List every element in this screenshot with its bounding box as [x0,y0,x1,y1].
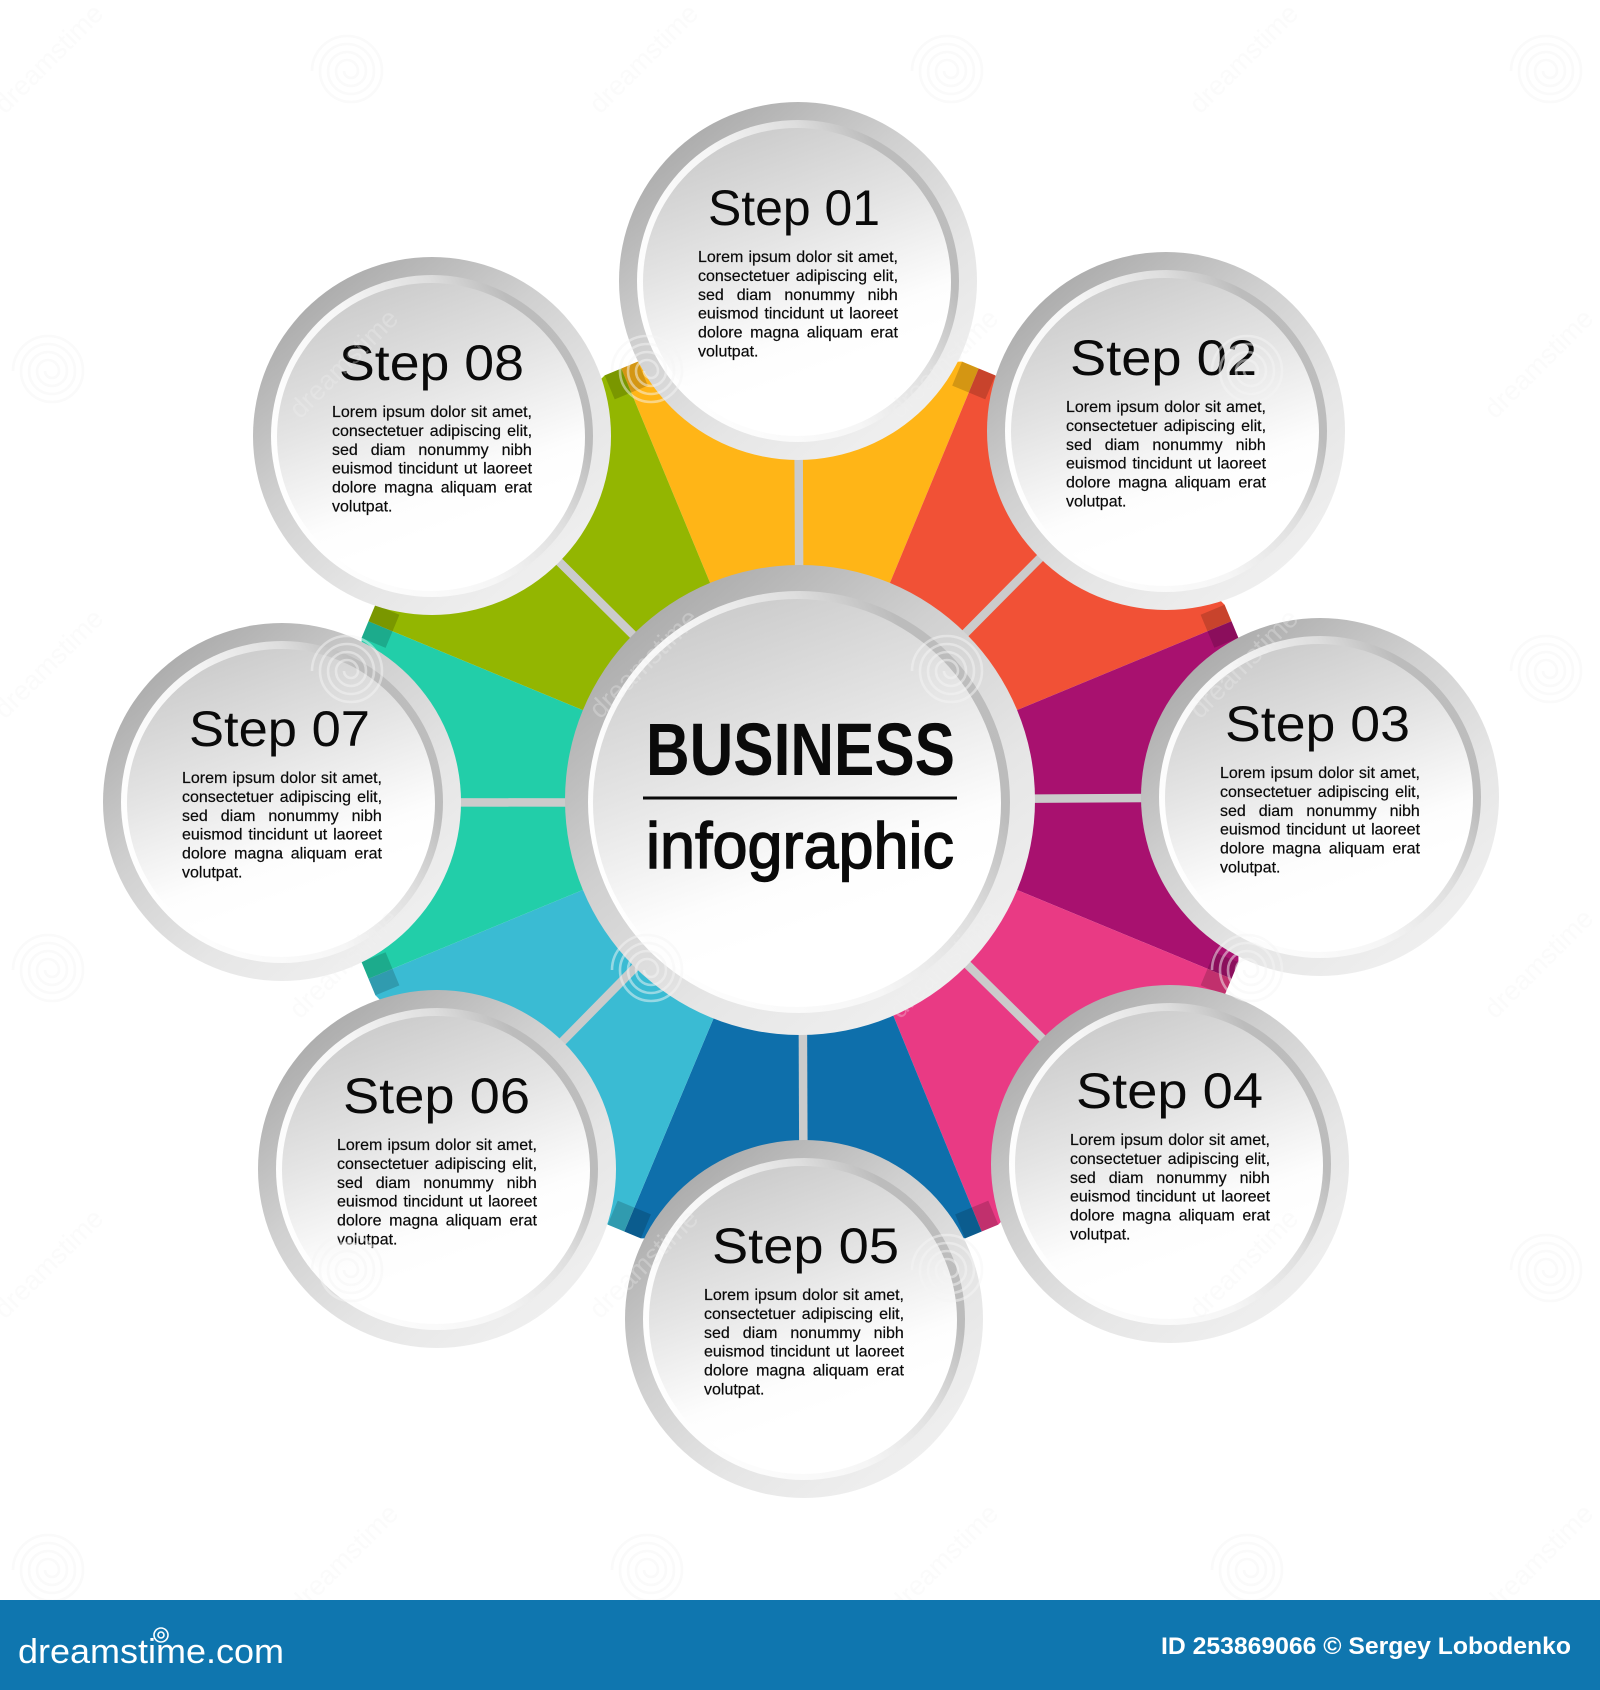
text: step 02 body: sed diam nonummy nibh [1066,437,1266,454]
watermark pattern: dreamstime [583,0,704,119]
segment: orange-red (step 02) [800,368,1232,800]
text: step 08 body: consectetuer adipiscing elit, [332,423,532,440]
text: step 01 body: volutpat. [698,344,758,360]
panel: step 05 [625,1140,983,1498]
text: step 03 body: volutpat. [1220,860,1280,876]
darker rim tips [362,362,1238,1238]
text: step 06 body: euismod tincidunt ut laoreet [337,1194,538,1211]
segment: green (step 08) [368,368,800,800]
panel: step 02 [987,252,1345,610]
text: step 01 body: euismod tincidunt ut laoreet [698,306,899,323]
text: step 02 body: Lorem ipsum dolor sit amet, [1066,399,1266,416]
center circle [565,565,1035,1035]
segment: yellow (step 01) [621,362,979,800]
heading: step 04: Step 04 [1076,1063,1263,1119]
heading: step 02: Step 02 [1070,330,1257,386]
footer bar [0,1600,1600,1690]
text: step 04 body: volutpat. [1070,1226,1130,1244]
panel: step 06 [258,990,616,1348]
colored segment wheel [362,362,1238,1238]
text: step 03 body: dolore magna aliquam erat [1220,841,1420,858]
text: step 05 body: consectetuer adipiscing elit, [704,1306,904,1323]
text: step 03 body: consectetuer adipiscing elit, [1220,784,1420,801]
text: step 05 body: volutpat. [704,1382,764,1398]
text: step 03 body: Lorem ipsum dolor sit amet, [1220,765,1420,782]
text: step 07 body: Lorem ipsum dolor sit amet, [182,770,382,787]
text: step 04 body: consectetuer adipiscing elit, [1070,1151,1270,1168]
text: step 07 body: consectetuer adipiscing elit, [182,789,382,806]
text: step 07 body: euismod tincidunt ut laoreet [182,827,383,844]
text: step 02 body: euismod tincidunt ut laoreet [1066,456,1267,473]
text: step 08 body: sed diam nonummy nibh [332,442,532,459]
text: step 06 body: Lorem ipsum dolor sit amet, [337,1137,537,1154]
segment: cyan (step 06) [368,800,805,1232]
panel: step 08 [253,257,611,615]
divider line [643,796,957,800]
watermark pattern: dreamstime [1183,0,1304,119]
text: step 03 body: euismod tincidunt ut laoreet [1220,822,1421,839]
text: step 05 body: euismod tincidunt ut laoreet [704,1344,905,1361]
heading: step 03: Step 03 [1225,696,1410,752]
heading: step 08: Step 08 [339,335,524,391]
text: step 01 body: consectetuer adipiscing elit, [698,268,898,285]
watermark pattern: dreamstime [283,1498,404,1619]
watermark pattern: dreamstime [583,603,704,724]
watermark pattern: dreamstime [583,1203,704,1324]
panel: step 04 [991,985,1349,1343]
watermark pattern: dreamstime [283,303,404,424]
heading: step 05: Step 05 [712,1218,899,1274]
text: step 06 body: volutpat. [337,1232,397,1248]
text: step 06 body: sed diam nonummy nibh [337,1175,537,1192]
text: step 08 body: volutpat. [332,498,392,516]
text: step 01 body: dolore magna aliquam erat [698,325,898,342]
watermark pattern: dreamstime [1183,603,1304,724]
text: step 04 body: euismod tincidunt ut laoreet [1070,1189,1271,1206]
segment: blue (step 05) [624,800,982,1238]
icon: logo spiral [154,1628,168,1642]
text: step 05 body: dolore magna aliquam erat [704,1363,904,1380]
watermark pattern: dreamstime [1478,303,1599,424]
segment: pink (step 04) [800,800,1232,1232]
segment: purple (step 03) [800,621,1238,979]
text: step 08 body: euismod tincidunt ut laoreet [332,461,533,478]
text: step 06 body: consectetuer adipiscing elit, [337,1156,537,1173]
text: step 06 body: dolore magna aliquam erat [337,1213,537,1230]
subtitle: infographic: infographic [646,809,954,882]
watermark pattern: dreamstime [883,303,1004,424]
text: step 02 body: dolore magna aliquam erat [1066,475,1266,492]
text: step 07 body: sed diam nonummy nibh [182,808,382,825]
text: step 04 body: sed diam nonummy nibh [1070,1170,1270,1187]
text: step 07 body: dolore magna aliquam erat [182,846,382,863]
watermark pattern: dreamstime [1183,1203,1304,1324]
title: BUSINESS: BUSINESS [646,708,955,791]
watermark pattern: dreamstime [1478,903,1599,1024]
connector bars [282,281,1320,1319]
text: step 05 body: sed diam nonummy nibh [704,1325,904,1342]
watermark pattern: dreamstime [1478,1498,1599,1619]
panel: step 03 [1141,618,1499,976]
footer credit: ID 253869066 © Sergey Lobodenko [1161,1633,1571,1660]
text: step 04 body: Lorem ipsum dolor sit amet, [1070,1132,1270,1149]
text: step 05 body: Lorem ipsum dolor sit amet, [704,1287,904,1304]
panel: step 07 [103,623,461,981]
text: step 02 body: consectetuer adipiscing elit, [1066,418,1266,435]
text: step 04 body: dolore magna aliquam erat [1070,1208,1270,1225]
segment: teal (step 07) [362,621,800,979]
watermark pattern: dreamstime [883,903,1004,1024]
watermark pattern: dreamstime [883,1498,1004,1619]
text: step 07 body: volutpat. [182,864,242,882]
heading: step 01: Step 01 [708,180,880,236]
heading: step 06: Step 06 [343,1068,530,1124]
watermark pattern: dreamstime [283,903,404,1024]
heading: step 07: Step 07 [189,701,370,757]
text: step 03 body: sed diam nonummy nibh [1220,803,1420,820]
text: step 08 body: Lorem ipsum dolor sit amet, [332,404,532,421]
text: step 01 body: sed diam nonummy nibh [698,287,898,304]
text: step 08 body: dolore magna aliquam erat [332,480,532,497]
panel: step 01 [619,102,977,460]
text: step 01 body: Lorem ipsum dolor sit amet, [698,249,898,266]
text: step 02 body: volutpat. [1066,494,1126,510]
footer logo: dreamstime.com: dreamstime.com [18,1633,284,1671]
